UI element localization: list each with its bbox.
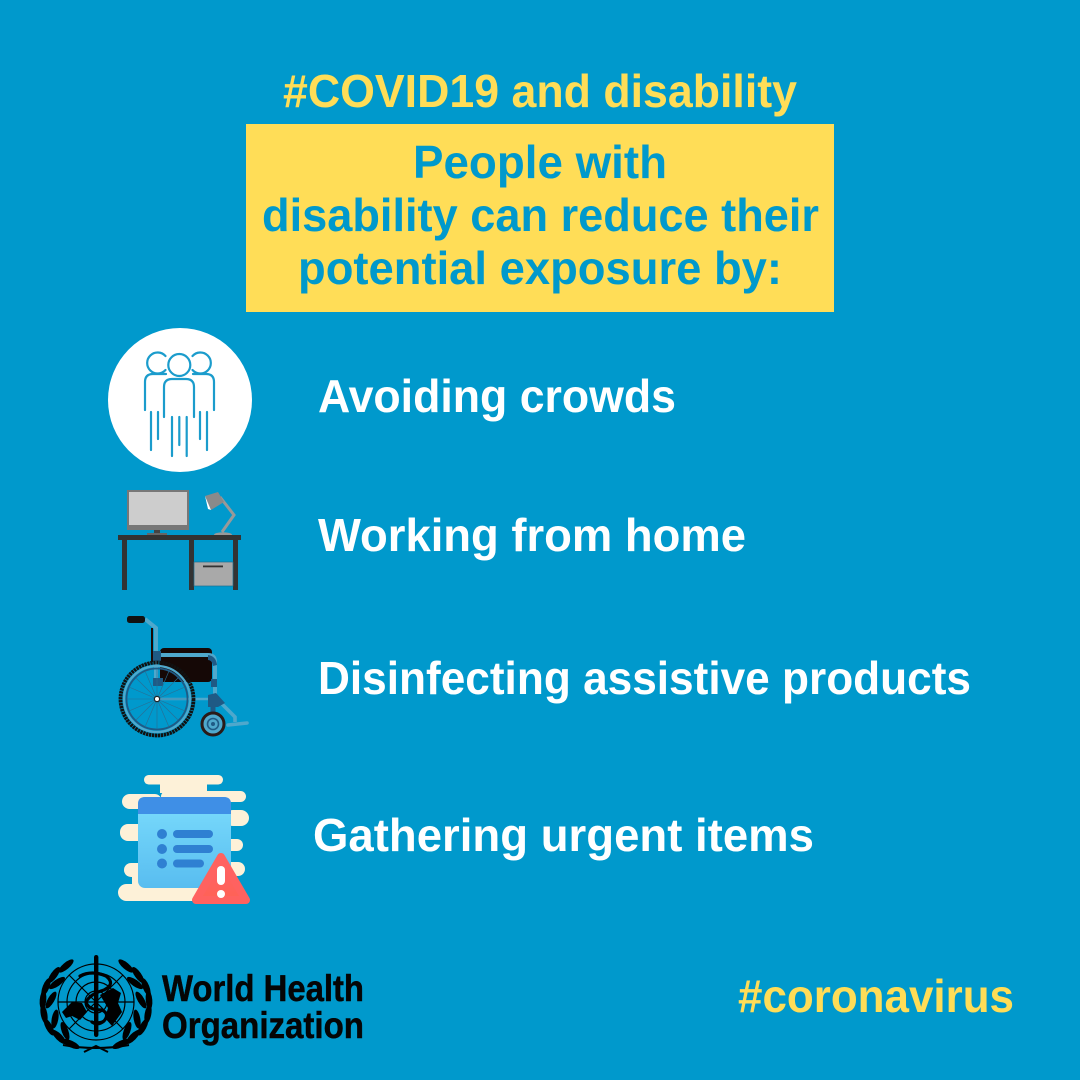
icon: wheelchair (120, 616, 247, 736)
text: avoiding crowds: Avoiding crowds (318, 370, 676, 422)
panel: headline box (246, 124, 834, 312)
icon: urgent items list with warning (118, 775, 249, 901)
headline line 1: People with (413, 136, 667, 188)
hashtag: coronavirus: #coronavirus (738, 970, 1014, 1022)
icon: desk with computer and lamp (118, 490, 241, 590)
headline line 2: disability can reduce their (262, 189, 819, 241)
title: #COVID19 and disability (283, 65, 797, 117)
text: gathering urgent items: Gathering urgent items (313, 809, 814, 861)
logo: World Health Organization (39, 955, 364, 1052)
logo text line 2: Organization (162, 1005, 364, 1046)
logo text line 1: World Health (162, 968, 364, 1009)
text: disinfecting assistive products: Disinfecting assistive products (318, 652, 971, 704)
logo emblem (39, 955, 153, 1052)
text: working from home: Working from home (318, 509, 746, 561)
headline line 3: potential exposure by: (298, 242, 782, 294)
icon: crowd of people (108, 328, 252, 472)
